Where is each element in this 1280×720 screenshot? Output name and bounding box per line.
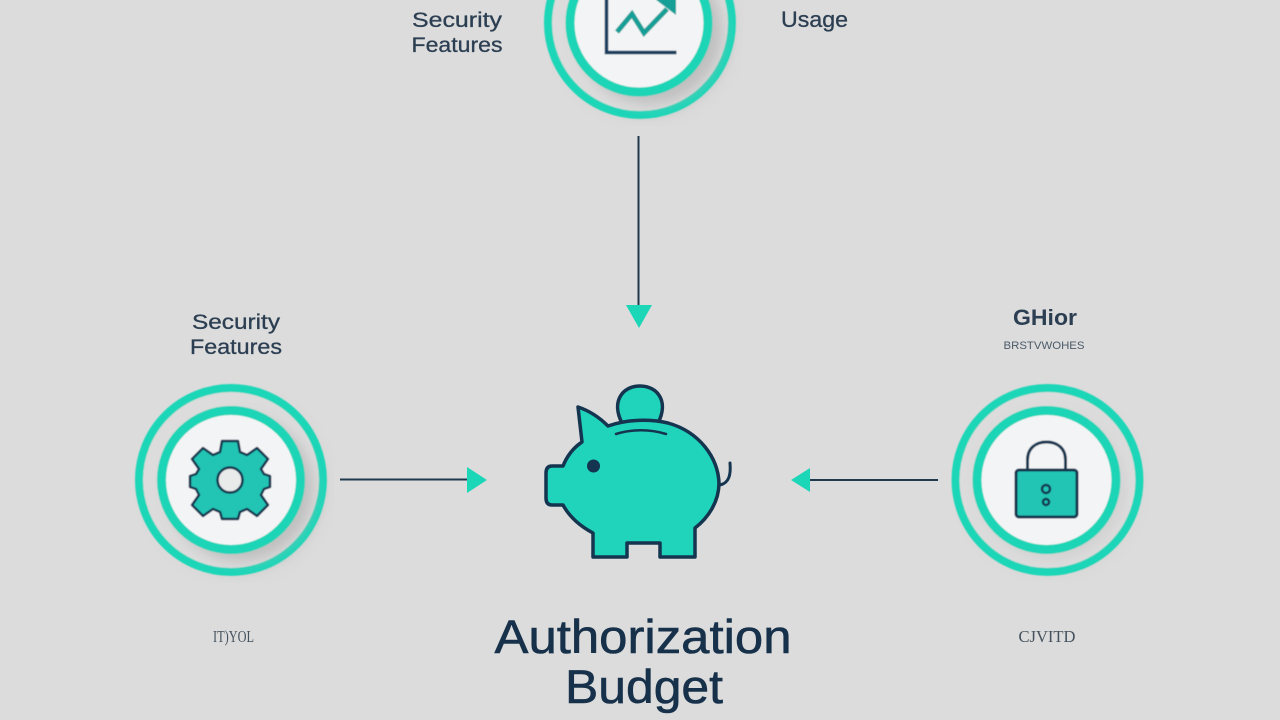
label: top left security features [412,9,503,57]
label: right heading: GHior [1013,305,1077,330]
node: usage chart (top) [548,0,734,117]
label: bottom left: IT)YOL [213,627,254,646]
icon: line chart with rising arrow [606,0,676,52]
pig body [546,407,719,557]
coin [618,386,662,423]
tail [720,463,730,485]
label: top left security features: Security [412,9,503,32]
arrow: right node to budget [791,468,938,492]
label: top left security features: Features [412,34,502,57]
node: settings gear (left) [139,388,325,574]
arrow: left node to budget [340,467,487,493]
icon: gear [190,441,270,519]
label: left security features: Security [192,311,281,334]
label: left security features: Features [190,336,282,359]
title: Budget [565,660,723,713]
icon: padlock [1016,442,1077,517]
title: Authorization [494,610,792,663]
title [494,610,792,713]
eye [587,460,600,472]
label: usage: Usage [781,7,848,32]
label: left security features [190,311,282,359]
coin slot [616,430,666,434]
icon: piggy bank [546,386,730,557]
arrow: top to budget [626,136,652,328]
node: padlock (right) [956,388,1140,573]
label: bottom right: CJVITD [1018,627,1076,646]
label: right subheading: BRSTVWOHES [1004,340,1084,352]
label: right heading [1004,305,1084,352]
